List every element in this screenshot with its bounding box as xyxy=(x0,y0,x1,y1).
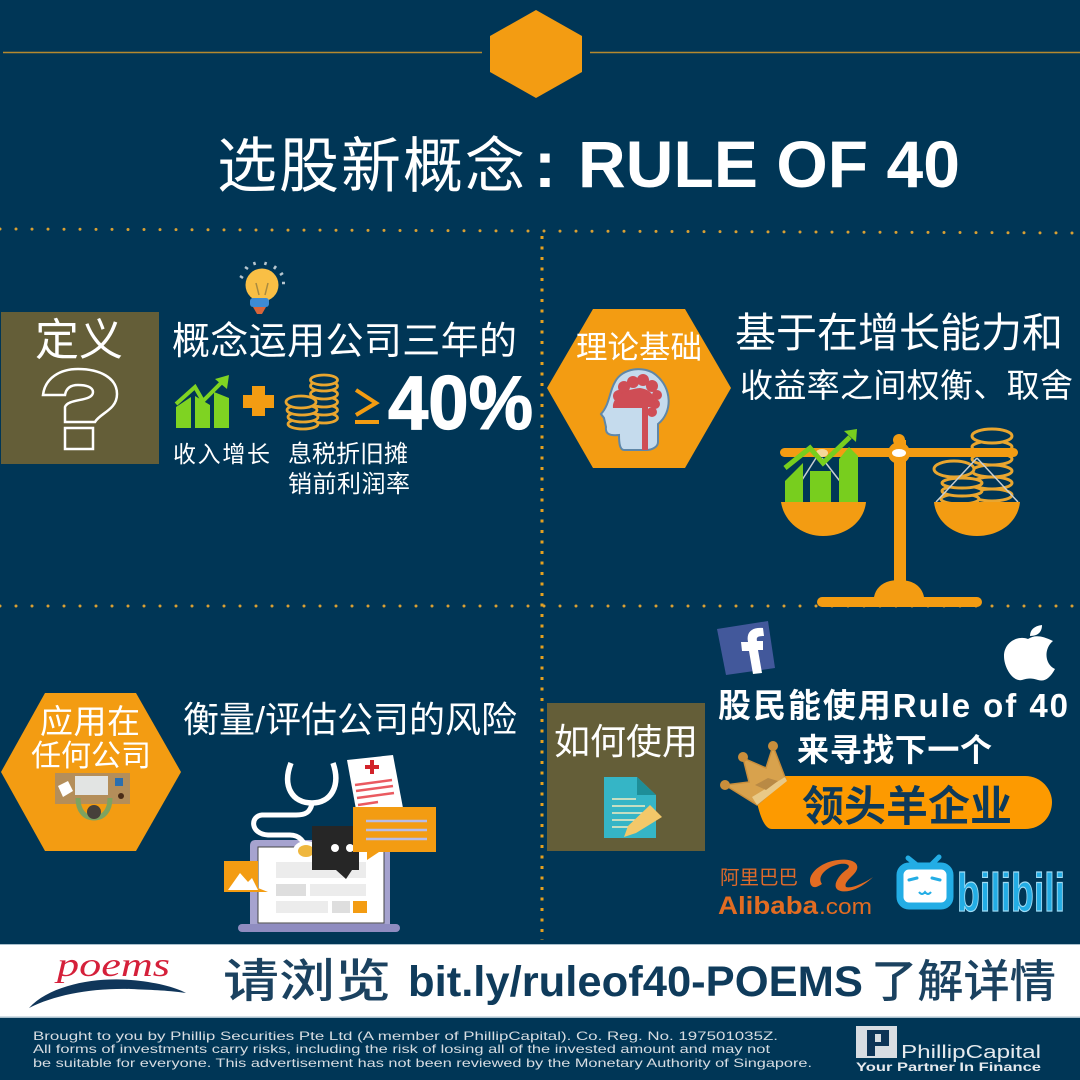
how-to-use badge xyxy=(547,703,705,851)
logo: alibaba xyxy=(718,860,873,920)
how-to-use heading: 股民能使用Rule of 40 xyxy=(718,687,1068,724)
call-to-action text: 请浏览 xyxy=(223,955,391,1007)
call-to-action text: bit.ly/ruleof40-POEMS xyxy=(408,958,863,1006)
banner: market leader xyxy=(752,776,1052,830)
title: 选股新概念 xyxy=(217,133,525,200)
application badge: 应用在 xyxy=(40,703,140,740)
logo: poems xyxy=(29,947,186,1008)
call-to-action text xyxy=(223,955,1056,1007)
logo: alibaba: 阿里巴巴 xyxy=(720,867,798,889)
logo: poems: poems xyxy=(54,947,170,984)
icon: apple xyxy=(1004,625,1055,681)
banner: market leader: 领头羊企业 xyxy=(802,783,1012,830)
label: EBITDA margin: 销前利润率 xyxy=(288,471,410,498)
panel: how to use xyxy=(547,621,1068,923)
icon: crown xyxy=(720,741,787,805)
title xyxy=(217,127,960,201)
application badge: 任何公司 xyxy=(31,740,151,773)
theory heading: 收益率之间权衡、取舍 xyxy=(740,367,1073,404)
icon: growth chart xyxy=(176,375,229,428)
how-to-use badge: 如何使用 xyxy=(554,721,698,762)
panel: applies to any company xyxy=(1,693,517,932)
logo: alibaba: .com xyxy=(819,894,872,919)
icon: plus xyxy=(243,386,274,416)
disclaimer: All forms of investments carry risks, including the risk of losing all of the invested amount and may not xyxy=(33,1042,771,1056)
icon: laptop with stethoscope xyxy=(224,755,436,932)
risk heading: 衡量/评估公司的风险 xyxy=(183,699,517,740)
label: EBITDA margin: 息税折旧摊 xyxy=(288,441,408,468)
theory heading: 基于在增长能力和 xyxy=(735,310,1063,356)
logo: bilibili xyxy=(900,857,1065,923)
banner: call to action xyxy=(0,944,1080,1018)
label: EBITDA margin xyxy=(288,441,410,498)
logo: PhillipCapital: PhillipCapital xyxy=(901,1042,1041,1062)
title: : xyxy=(534,127,556,201)
icon: question mark xyxy=(43,369,117,449)
panel: theoretical basis xyxy=(547,309,1073,607)
theory heading xyxy=(735,310,1073,404)
icon: facebook xyxy=(717,621,775,675)
how-to-use heading xyxy=(718,687,1068,768)
disclaimer: Brought to you by Phillip Securities Pte Ltd (A member of PhillipCapital). Co. Reg. No. 197501035Z. xyxy=(33,1029,778,1043)
greater or equal symbol xyxy=(355,390,379,422)
title: RULE OF 40 xyxy=(578,127,960,201)
theory badge: 理论基础 xyxy=(576,329,702,365)
call-to-action text: 了解详情 xyxy=(871,956,1056,1007)
application badge xyxy=(1,693,181,851)
icon: brain head xyxy=(601,369,669,450)
definition badge: 定义 xyxy=(35,316,123,365)
icon: balance scale xyxy=(780,429,1020,607)
icon: document and pencil xyxy=(604,777,662,838)
figure: 40%: 40% xyxy=(388,361,533,446)
logo: PhillipCapital: Your Partner In Finance xyxy=(856,1062,1041,1074)
theory badge xyxy=(547,309,731,468)
icon: desk worker xyxy=(55,773,130,819)
how-to-use heading: 来寻找下一个 xyxy=(797,732,992,768)
icon: light bulb xyxy=(240,262,285,314)
disclaimer: be suitable for everyone. This advertisement has not been reviewed by the Monetary Authority of Singapore. xyxy=(33,1056,812,1070)
definition text: 概念运用公司三年的 xyxy=(172,321,517,363)
disclaimer xyxy=(33,1029,812,1070)
logo: alibaba: Alibaba xyxy=(718,892,819,920)
icon: top hexagon xyxy=(490,10,582,98)
logo: PhillipCapital xyxy=(856,1026,1041,1074)
label: revenue growth: 收入增长 xyxy=(173,441,270,467)
definition badge xyxy=(1,312,159,464)
panel: definition xyxy=(1,262,533,498)
icon: coin stack xyxy=(286,375,338,429)
